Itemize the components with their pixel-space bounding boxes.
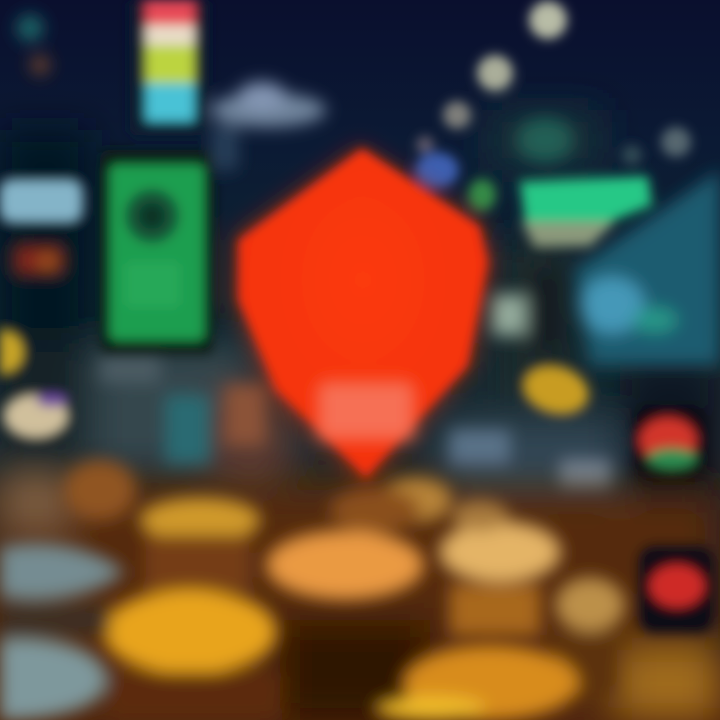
- coin pile: [0, 460, 720, 720]
- coin pile base: [0, 470, 720, 720]
- icon: right yellow coin: [518, 359, 594, 421]
- icon: red badge: [632, 405, 707, 485]
- icon: left pale badge: [4, 393, 68, 438]
- icon: left yellow coin: [0, 330, 24, 374]
- icon: blue bubble: [415, 152, 496, 211]
- city haze: [0, 110, 720, 650]
- shield: [232, 145, 492, 484]
- building: right teal glass: [575, 170, 720, 365]
- icon: traffic light tower: [130, 0, 208, 135]
- shield body: [238, 148, 488, 478]
- shield glow: [232, 145, 492, 484]
- icon: trail of glowing dots: [416, 1, 691, 165]
- sign: green banner: [520, 176, 652, 246]
- icon: lower red badge: [638, 545, 714, 635]
- icon: small top-left glyph: [17, 15, 49, 74]
- coin stacks: [0, 460, 624, 720]
- sign: left red glow: [14, 245, 64, 275]
- icon: pale tile: [492, 270, 560, 350]
- shield pale emblem: [318, 382, 414, 440]
- panel: green phone screen: [100, 150, 214, 355]
- icon: cloud: [210, 82, 326, 170]
- sign: left blue banner: [0, 180, 82, 222]
- skyline details: [100, 118, 640, 550]
